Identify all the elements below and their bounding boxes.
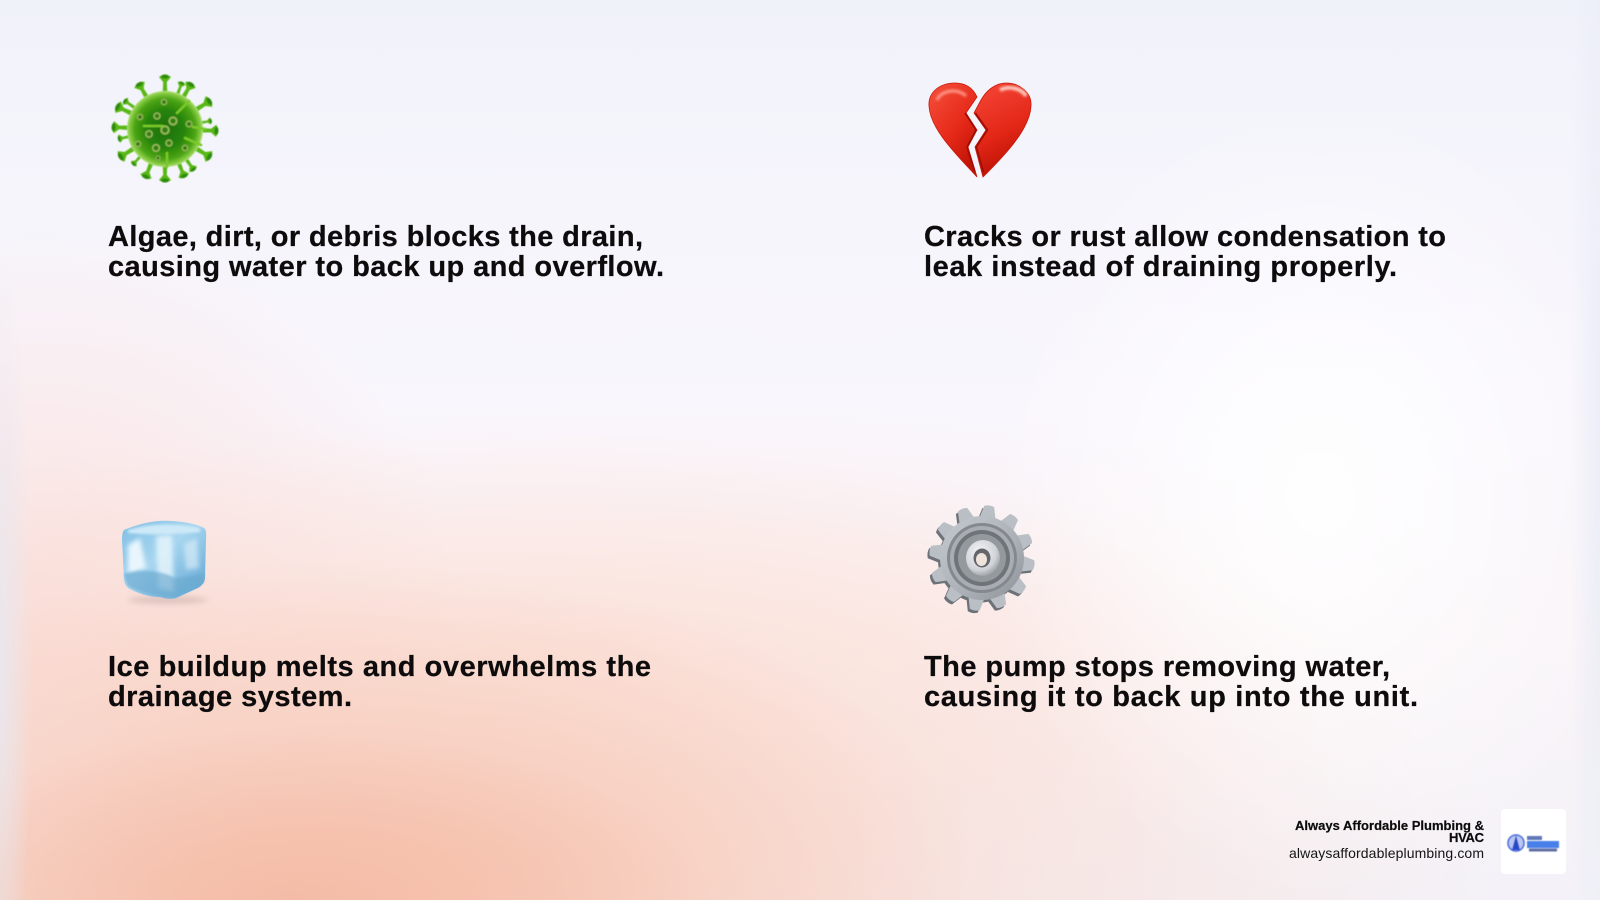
- card text: damaged pan: Cracks or rust allow condensation to: [924, 221, 1446, 253]
- card text: damaged pan: leak instead of draining properly.: [924, 251, 1397, 283]
- card text: clogged drain: [108, 221, 664, 283]
- card text: clogged drain: causing water to back up and overflow.: [108, 251, 664, 283]
- card text: frozen coil: Ice buildup melts and overwhelms the: [108, 651, 651, 683]
- card text: frozen coil: drainage system.: [108, 681, 352, 713]
- footer brand text: [1289, 818, 1485, 861]
- icon: broken heart: [929, 83, 1031, 177]
- icon: virus: [111, 74, 219, 182]
- card text: damaged pan: [924, 221, 1446, 283]
- footer logo: [1501, 809, 1566, 874]
- footer brand text: Always Affordable Plumbing &: [1295, 818, 1484, 833]
- icon: ice cube: [122, 521, 208, 604]
- card text: failed pump: [924, 651, 1418, 713]
- card text: failed pump: causing it to back up into the unit.: [924, 681, 1418, 713]
- card text: frozen coil: [108, 651, 651, 713]
- card text: failed pump: The pump stops removing water,: [924, 651, 1390, 683]
- footer brand text: alwaysaffordableplumbing.com: [1289, 845, 1484, 861]
- card text: clogged drain: Algae, dirt, or debris blocks the drain,: [108, 221, 643, 253]
- footer brand text: HVAC: [1449, 830, 1485, 845]
- icon: gear: [926, 504, 1036, 614]
